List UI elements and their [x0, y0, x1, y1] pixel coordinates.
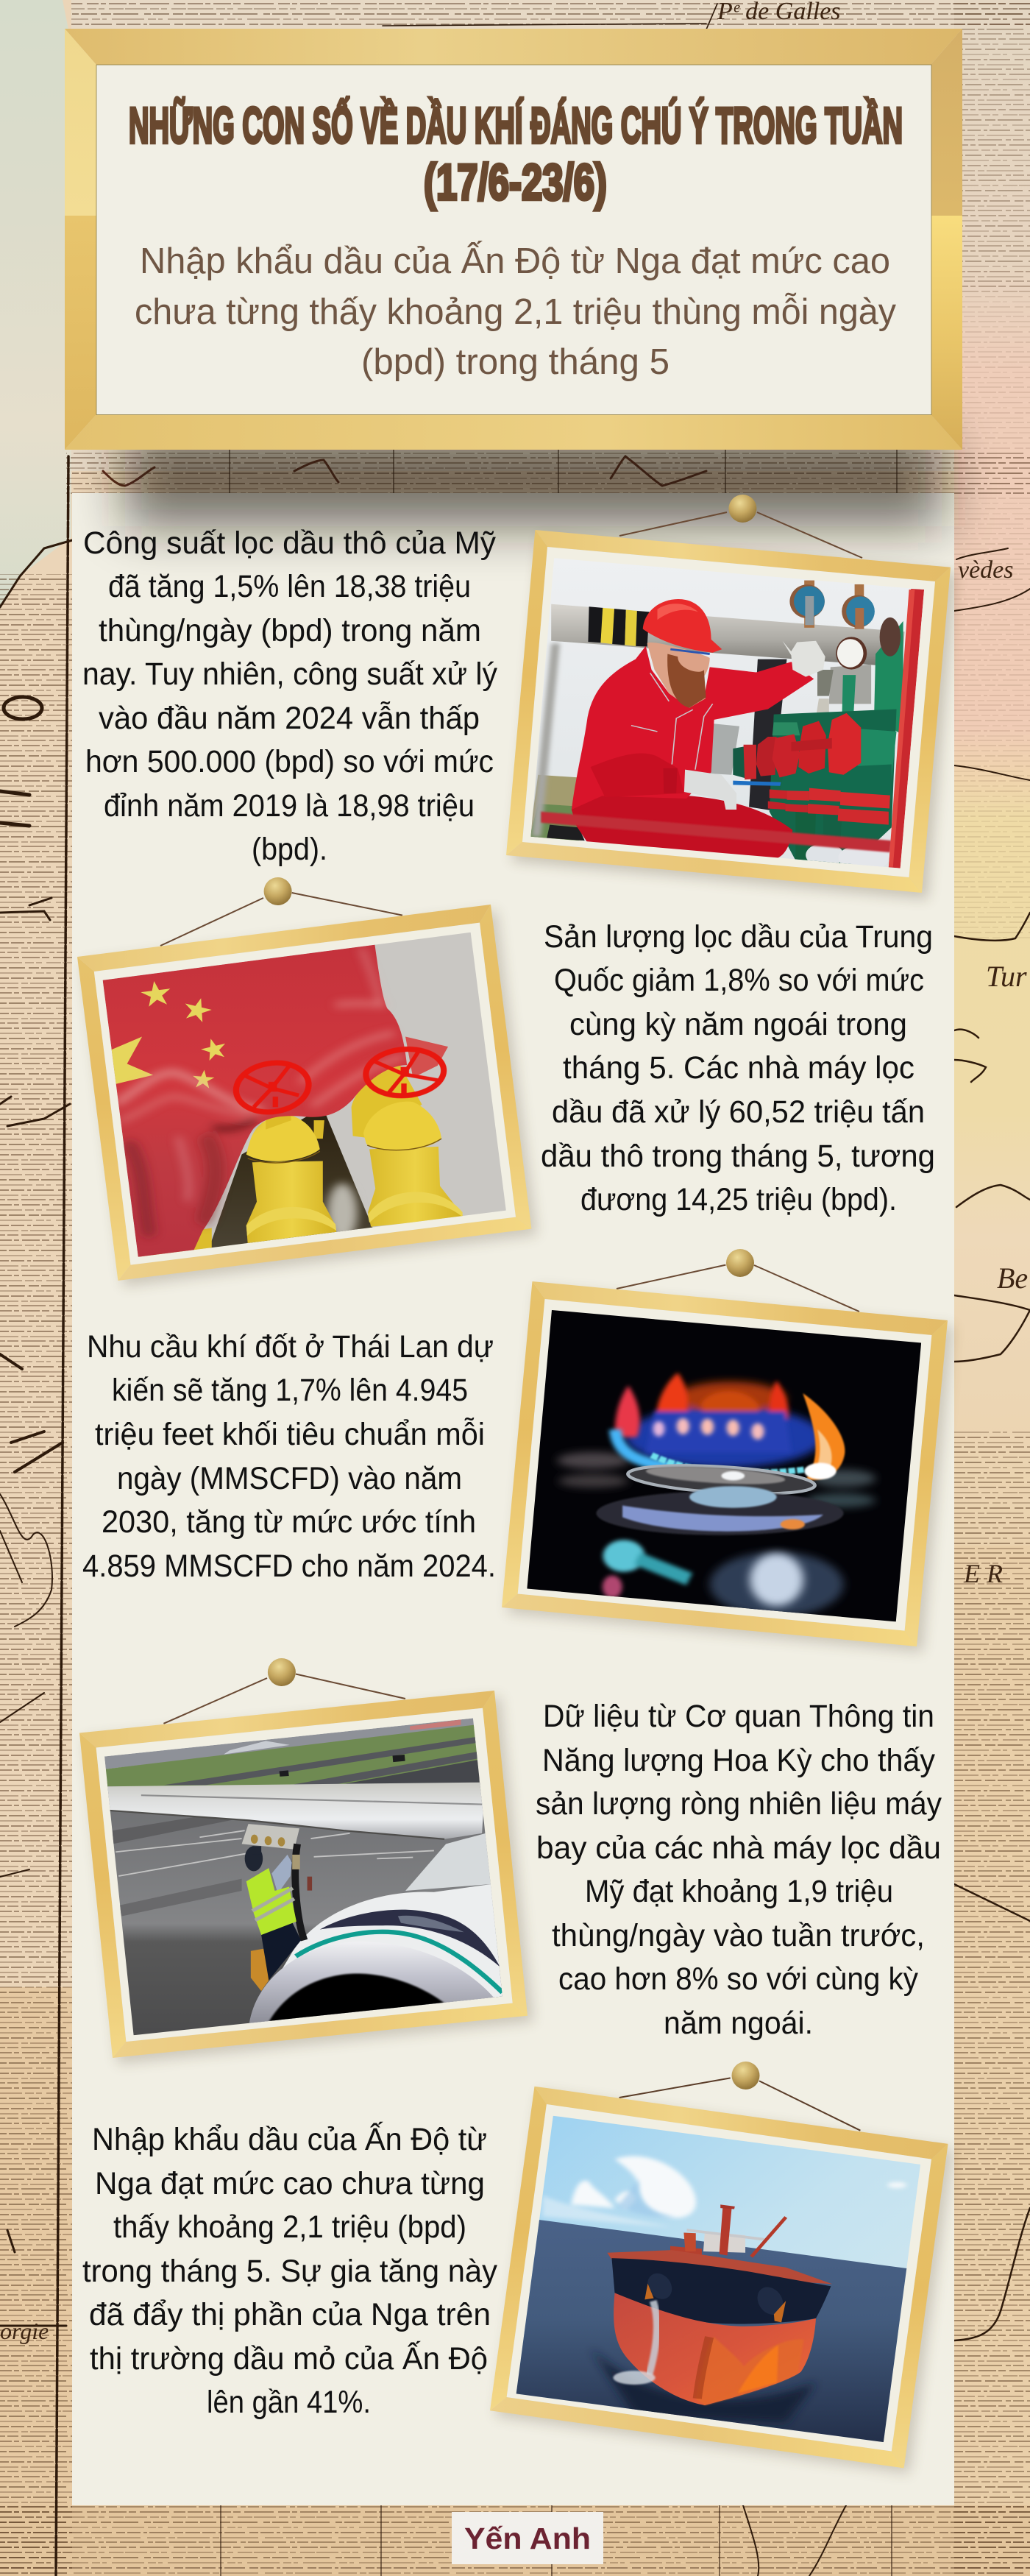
text block: US jet fuel: Năng lượng Hoa Kỳ cho thấy	[542, 1743, 935, 1778]
pin 2	[264, 877, 292, 905]
text block: US refining: nay. Tuy nhiên, công suất xử lý	[82, 657, 497, 692]
text block: China refining: cùng kỳ năm ngoái trong	[569, 1007, 907, 1042]
text block: US refining: đỉnh năm 2019 là 18,98 triệu	[104, 788, 475, 824]
text block: US refining: vào đầu năm 2024 vẫn thấp	[99, 701, 480, 736]
text block: US refining: (bpd).	[252, 832, 327, 867]
pin 1	[728, 495, 756, 523]
text block: Thailand gas: Nhu cầu khí đốt ở Thái Lan dự	[87, 1329, 494, 1365]
text block: Thailand gas: ngày (MMSCFD) vào năm	[117, 1461, 462, 1496]
pin 4	[268, 1658, 296, 1686]
text block: China refining: Sản lượng lọc dầu của Trung	[544, 919, 933, 955]
background: antique map: orgie	[0, 2318, 49, 2344]
fuel worker	[245, 1846, 301, 1991]
text block: US jet fuel: bay của các nhà máy lọc dầu	[536, 1830, 941, 1866]
tanker hull	[607, 2250, 832, 2284]
text block: India imports: thị trường dầu mỏ của Ấn Độ	[90, 2341, 488, 2377]
subtitle: chưa từng thấy khoảng 2,1 triệu thùng mỗi ngày	[135, 292, 896, 332]
text block: India imports: Nga đạt mức cao chưa từng	[95, 2166, 485, 2201]
wing	[107, 1783, 483, 1839]
fuel panel	[242, 1824, 299, 1850]
text block: US refining: hơn 500.000 (bpd) so với mức	[85, 744, 494, 779]
photo 2	[98, 928, 512, 1262]
subtitle	[135, 241, 896, 382]
hanging string 3	[617, 1265, 859, 1312]
valves and gauge	[804, 581, 814, 628]
text block: India imports: trong tháng 5. Sự gia tăng này	[82, 2254, 497, 2289]
picture 4: aircraft refuelling	[79, 1658, 533, 2064]
text block: India imports: lên gần 41%.	[207, 2385, 371, 2420]
text block: Thailand gas: 4.859 MMSCFD cho năm 2024.	[82, 1549, 496, 1584]
photo 3	[524, 1306, 928, 1626]
text block: Thailand gas: triệu feet khối tiêu chuẩn mỗi	[95, 1417, 485, 1452]
text block: Thailand gas: kiến sẽ tăng 1,7% lên 4.945	[112, 1373, 468, 1408]
frame 2	[77, 905, 531, 1281]
fuel hose	[295, 1844, 304, 1940]
photo 5	[513, 2112, 927, 2444]
text block: India imports	[82, 2122, 497, 2420]
text block: India imports: thấy khoảng 2,1 triệu (bpd)	[113, 2209, 466, 2245]
header inner card	[96, 65, 931, 415]
pin 5	[731, 2062, 759, 2090]
man	[572, 792, 792, 858]
hanging string 5	[619, 2078, 860, 2131]
text block: US jet fuel: thùng/ngày vào tuần trước,	[552, 1918, 925, 1953]
text block: US jet fuel: Mỹ đạt khoảng 1,9 triệu	[585, 1874, 893, 1909]
text block: US jet fuel: cao hơn 8% so với cùng kỳ	[558, 1961, 918, 1997]
photo 1	[527, 554, 928, 872]
text block: US jet fuel: Dữ liệu từ Cơ quan Thông tin	[543, 1699, 934, 1734]
sea	[513, 2219, 927, 2444]
flag folds	[118, 949, 401, 1231]
right pipe	[352, 1061, 422, 1139]
left pipe	[246, 1161, 337, 1244]
text block: China refining	[541, 919, 935, 1217]
text block: China refining: Quốc giảm 1,8% so với mức	[554, 963, 924, 998]
background: antique map: vèdes	[958, 556, 1014, 584]
text block: India imports: đã đẩy thị phần của Nga trên	[89, 2297, 491, 2332]
byline box	[452, 2512, 603, 2564]
background: antique map: E R	[963, 1559, 1003, 1588]
frame 1	[506, 530, 951, 893]
text block: US jet fuel	[536, 1699, 942, 2041]
text block: Thailand gas: 2030, tăng từ mức ước tính	[102, 1504, 476, 1540]
tanker superstructure	[670, 2204, 786, 2257]
text block: US refining	[82, 526, 497, 867]
valve wheels	[231, 1046, 447, 1118]
text block: China refining: đương 14,25 triệu (bpd).	[580, 1182, 897, 1217]
flag stars	[111, 980, 229, 1089]
engine	[405, 1833, 491, 1891]
pin 3	[726, 1249, 754, 1277]
text block: China refining: tháng 5. Các nhà máy lọc	[563, 1050, 914, 1086]
text block: US refining: thùng/ngày (bpd) trong năm	[99, 613, 481, 648]
text block: US refining: Công suất lọc dầu thô của Mỹ	[83, 526, 496, 561]
text block: China refining: dầu đã xử lý 60,52 triệu tấn	[552, 1094, 925, 1130]
picture 2: China flag and pipes	[77, 877, 537, 1287]
text block: India imports: Nhập khẩu dầu của Ấn Độ từ	[92, 2122, 487, 2157]
header frame	[65, 29, 962, 450]
background: antique map: Tur	[986, 960, 1027, 993]
byline text: Yến Anh	[464, 2522, 591, 2555]
flag	[405, 1037, 448, 1078]
photo 4	[101, 1719, 509, 2039]
picture 1: refinery worker	[506, 495, 956, 899]
hanging string 4	[163, 1674, 405, 1724]
text block: China refining: dầu thô trong tháng 5, tương	[541, 1139, 935, 1174]
text block: US jet fuel: sản lượng ròng nhiên liệu máy	[536, 1786, 942, 1822]
clouds	[543, 2156, 906, 2227]
frame 3	[502, 1281, 948, 1646]
panel: main content paper	[72, 493, 954, 2505]
text block: Thailand gas	[82, 1329, 496, 1584]
frame 5	[490, 2087, 948, 2468]
subtitle: Nhập khẩu dầu của Ấn Độ từ Nga đạt mức cao	[140, 241, 890, 281]
text block: US jet fuel: năm ngoái.	[664, 2006, 813, 2041]
frame 4	[79, 1691, 528, 2058]
hanging string 1	[619, 512, 862, 558]
picture 3: gas flame	[502, 1249, 953, 1652]
picture 5: oil tanker	[490, 2062, 953, 2474]
title: (17/6-23/6)	[424, 154, 607, 210]
text block: US refining: đã tăng 1,5% lên 18,38 triệu	[108, 569, 471, 604]
tarmac markings	[116, 1830, 434, 1876]
background: antique map: Be	[997, 1262, 1028, 1295]
title	[129, 97, 903, 210]
header shadow	[125, 434, 942, 526]
manifold	[770, 710, 897, 867]
subtitle: (bpd) trong tháng 5	[361, 342, 670, 382]
hanging string 2	[160, 893, 402, 946]
